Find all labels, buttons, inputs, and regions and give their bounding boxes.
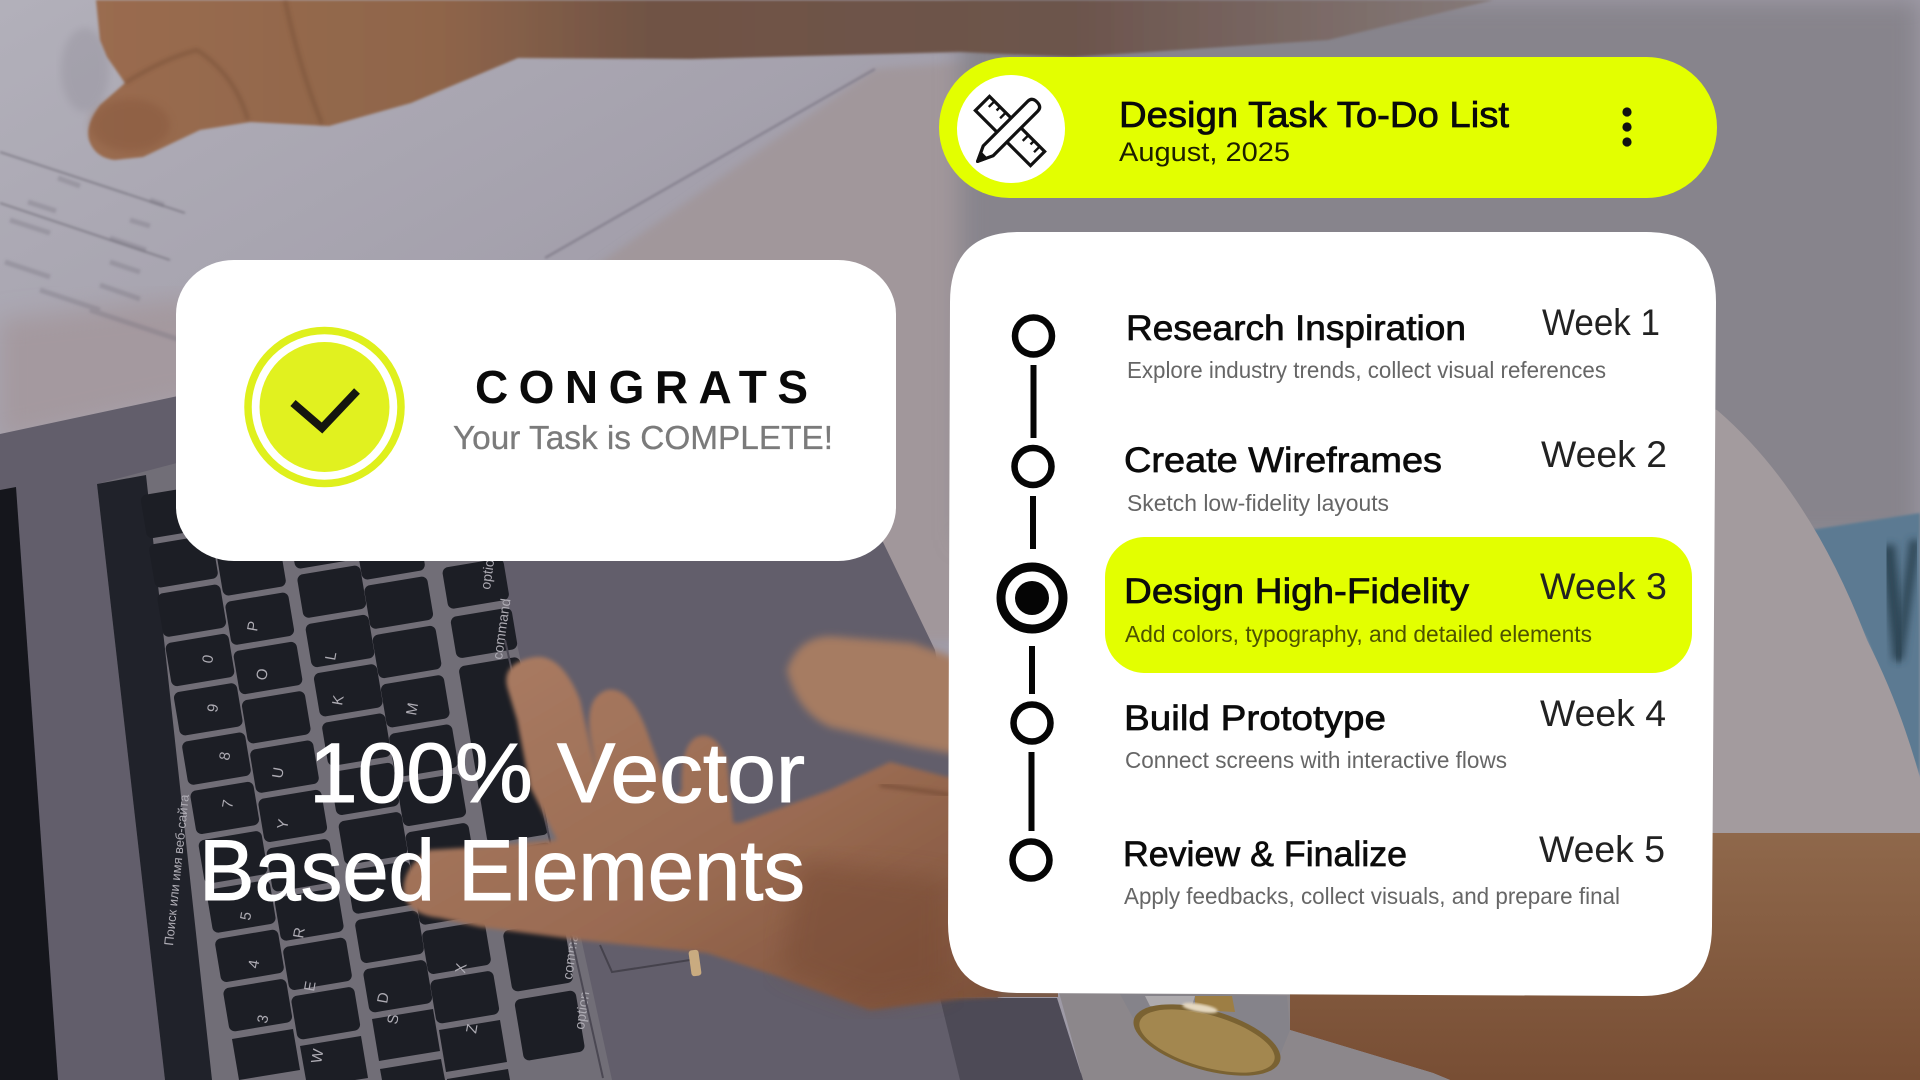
trackpad line: [505, 640, 603, 1078]
highlight: active task: [1105, 537, 1692, 673]
timeline: [1001, 318, 1063, 878]
text: task complete: Your Task is COMPLETE!: [453, 419, 833, 456]
thumb at right: [787, 636, 960, 755]
keyboard labels: 3: [254, 1014, 272, 1025]
wedding ring: [688, 949, 702, 977]
laptop body: [0, 365, 1090, 1080]
caption: vector elements: [199, 726, 805, 919]
panel: congrats card: [176, 260, 896, 561]
keyboard frame: [97, 420, 612, 1080]
dark lower area: [940, 998, 1083, 1080]
keyboard labels: K: [329, 694, 348, 707]
panel: header pill: [939, 57, 1717, 198]
touch bar: [97, 475, 212, 1080]
keyboard labels: 8: [216, 751, 234, 762]
heading: congrats: CONGRATS: [475, 361, 808, 413]
task: review and finalize: Week 5: [1539, 829, 1665, 870]
paper printed lines: [0, 152, 185, 340]
keyboard labels: 9: [204, 703, 222, 714]
keyboard labels: Y: [274, 818, 293, 831]
caption: vector elements: Based Elements: [199, 823, 805, 919]
left dark stripe: [0, 487, 58, 1080]
task: review and finalize: [1123, 829, 1665, 909]
keyboard labels: Z: [463, 1023, 482, 1035]
task: research inspiration: Week 1: [1542, 302, 1660, 343]
keyboard keys: [140, 466, 585, 1080]
crease at thumb base: [880, 785, 950, 795]
bottom strip: [1057, 985, 1450, 1080]
heading: list title: Design Task To-Do List: [1119, 94, 1509, 135]
task: research inspiration: Explore industry trends, collect visual references: [1127, 357, 1606, 383]
icon: ruler and pencil: [957, 75, 1065, 183]
paper warm area: [590, 60, 1000, 640]
paper lower area: [0, 300, 400, 440]
paper sheet at right: [1680, 400, 1920, 833]
paper fold line: [545, 69, 875, 258]
keyboard labels: W: [308, 1047, 328, 1065]
upper arm and hand: [88, 0, 1494, 160]
shadow of hand on paper: [61, 28, 109, 112]
task: create wireframes: Week 2: [1541, 434, 1667, 475]
keyboard labels: P: [244, 620, 263, 633]
keyboard labels: 5: [237, 911, 255, 922]
keyboard labels: command: [559, 917, 584, 980]
task: create wireframes: Create Wireframes: [1124, 441, 1442, 480]
task: review and finalize: Apply feedbacks, collect visuals, and prepare final: [1124, 883, 1620, 909]
task: build prototype: [1124, 693, 1666, 773]
keyboard labels: S: [384, 1013, 403, 1026]
panel: task list card: [948, 232, 1716, 996]
keyboard labels: O: [253, 667, 272, 682]
icon: more menu dots: [1622, 107, 1632, 147]
keyboard labels: option: [477, 550, 498, 590]
task: design high-fidelity: Week 3: [1540, 566, 1667, 607]
keyboard labels: [161, 550, 592, 1065]
keyboard labels: 7: [219, 799, 237, 810]
keyboard labels: R: [290, 926, 309, 940]
keyboard labels: Поиск или имя веб-сайта: [161, 793, 192, 946]
keyboard labels: L: [322, 651, 340, 662]
trackpad notch: [600, 945, 690, 972]
task: design high-fidelity: Design High-Fidelity: [1124, 572, 1470, 611]
task: research inspiration: Research Inspiration: [1126, 309, 1466, 348]
task: design high-fidelity: [1124, 566, 1667, 647]
right background: [960, 0, 1920, 540]
wristwatch: [1120, 990, 1290, 1080]
keyboard labels: 4: [245, 959, 263, 970]
task: build prototype: Connect screens with interactive flows: [1125, 747, 1507, 773]
thumb tip shade: [90, 99, 170, 151]
brown strip under card: [948, 980, 1058, 997]
task: create wireframes: [1124, 434, 1667, 516]
keyboard labels: X: [452, 962, 471, 975]
jeans at right: [1810, 513, 1920, 778]
task: build prototype: Week 4: [1540, 693, 1666, 734]
keyboard labels: D: [374, 991, 393, 1005]
keyboard labels: M: [403, 701, 422, 717]
right forearm: [1287, 833, 1920, 1080]
keyboard labels: U: [269, 766, 288, 780]
text: date: August, 2025: [1119, 137, 1290, 167]
task: research inspiration: [1126, 302, 1660, 383]
task: create wireframes: Sketch low-fidelity layouts: [1127, 490, 1389, 516]
keyboard labels: option: [571, 990, 592, 1030]
keyboard labels: 0: [199, 654, 217, 665]
caption: vector elements: 100% Vector: [309, 726, 805, 820]
hand creases: [125, 0, 322, 124]
keyboard labels: command: [489, 597, 514, 660]
task: design high-fidelity: Add colors, typography, and detailed elements: [1125, 621, 1592, 647]
hand shading: [780, 860, 947, 1005]
lower hand: [404, 657, 1000, 1010]
task: build prototype: Build Prototype: [1124, 699, 1386, 738]
icon: check circle: [248, 330, 401, 484]
keyboard labels: E: [301, 980, 320, 993]
task: review and finalize: Review & Finalize: [1123, 835, 1407, 874]
